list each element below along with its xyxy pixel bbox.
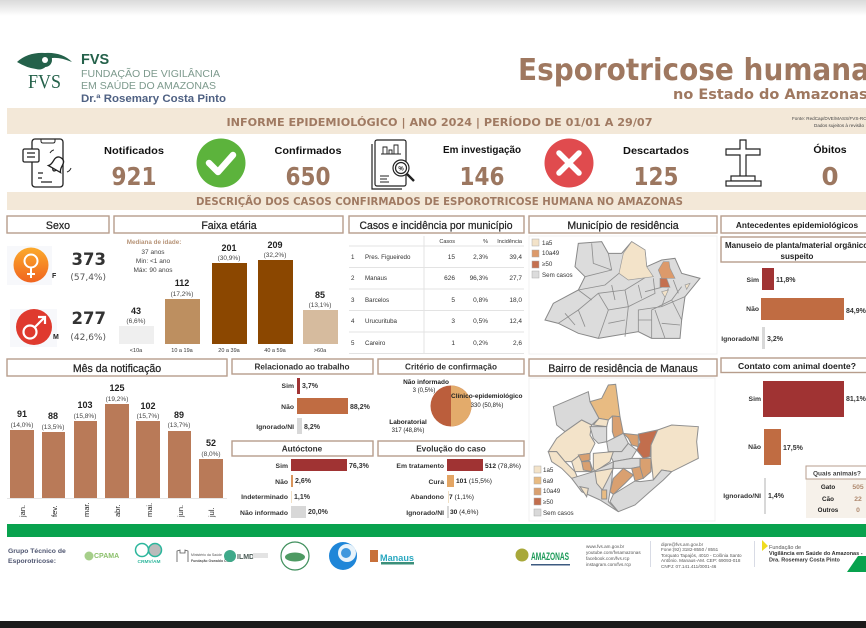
bar chart: idade: 209 <box>267 240 283 250</box>
panel: sexo: Sexo <box>46 220 70 232</box>
table: municipios: 5 <box>451 297 455 304</box>
table: quais animais: 0 <box>856 507 860 514</box>
bar chart: meses: 91 <box>17 409 27 419</box>
bar chart: meses: mai. <box>145 503 154 517</box>
panel: relacionado ao trabalho <box>232 359 373 434</box>
table: municipios: Manaus <box>365 275 387 282</box>
panel: manuseio: Ignorado/NI <box>721 336 759 343</box>
kpi: em investigacao: Em investigação <box>443 144 521 156</box>
bar chart: meses: 88 <box>48 411 58 421</box>
panel: manuseio: 3,2% <box>767 336 784 343</box>
table: municipios: 4 <box>351 318 355 325</box>
footer: contatos: Antônio. Manaus-AM. CEP: 69093-018 <box>661 558 741 563</box>
panel: criterio de confirmacao <box>378 359 524 434</box>
table: municipios: 0,2% <box>473 340 488 347</box>
legend: bairro: 10a49 <box>543 488 561 495</box>
legend: municipio: 10a49 <box>542 250 560 257</box>
panel: antecedentes epidemiologicos: Antecedentes epidemiológicos <box>736 220 858 230</box>
panel: relacionado ao trabalho: Não <box>281 404 294 411</box>
footer: contatos: instagram.com/fvs.rcp <box>586 562 631 567</box>
bar chart: idade <box>119 240 338 354</box>
panel: contato com animal: 81,1% <box>846 396 866 403</box>
bar chart: idade: (17,2%) <box>171 291 193 298</box>
panel: evolucao do caso: Ignorado/NI <box>406 510 444 517</box>
icon: grave cross <box>726 140 761 186</box>
logo: Fiocruz: Fundação Oswaldo Cruz <box>191 559 232 563</box>
kpi: notificados: Notificados <box>104 145 164 157</box>
table: municipios: 18,0 <box>509 297 522 304</box>
table: municipios: 0,5% <box>473 318 488 325</box>
table: municipios: % <box>483 239 488 245</box>
table: quais animais: 505 <box>852 484 864 491</box>
panel: relacionado ao trabalho: Ignorado/NI <box>256 424 294 431</box>
logo: ILMD: ILMD <box>237 554 254 561</box>
kpi: obitos: Óbitos <box>813 143 847 156</box>
bar chart: meses: 103 <box>77 400 93 410</box>
kpi: descartados <box>623 145 689 191</box>
panel: evolucao do caso: 30 (4,6%) <box>450 509 479 516</box>
kpi: confirmados: 650 <box>286 162 330 191</box>
logo: FVS: FVS <box>81 52 110 68</box>
logo: FVS: FUNDAÇÃO DE VIGILÂNCIA <box>81 67 220 80</box>
table: quais animais: Cão <box>822 496 834 503</box>
panel: autoctone: Não <box>275 479 288 486</box>
bar chart: idade: (6,6%) <box>126 318 146 325</box>
panel: evolucao do caso <box>378 441 524 518</box>
icon: female <box>7 246 52 285</box>
table: municipios <box>349 236 524 354</box>
panel: contato com animal: Não <box>748 444 761 451</box>
panel: contato com animal: Sim <box>749 396 761 403</box>
bar chart: idade: 112 <box>175 278 189 288</box>
panel: manuseio: 84,9% <box>846 308 866 315</box>
logo: ILMD <box>224 550 268 562</box>
panel: criterio de confirmacao: Critério de confirmação <box>405 362 497 372</box>
logo: Amazonas: AMAZONAS <box>531 551 569 563</box>
table: municipios: 1 <box>351 254 355 261</box>
panel: autoctone: Não informado <box>240 510 288 517</box>
logo: CPAMA <box>84 552 119 560</box>
legend: municipio <box>532 239 573 279</box>
table: municipios: 5 <box>351 340 355 347</box>
table: municipios: 2,6 <box>513 340 522 347</box>
logo: CRMV-AM <box>136 544 162 565</box>
panel: evolucao do caso: Abandono <box>410 494 444 501</box>
dark bottom strip <box>0 621 866 628</box>
table: municipios: 3 <box>451 318 455 325</box>
logo: CRMV-AM: CRMV/AM <box>138 559 160 565</box>
table: municipios: 1 <box>451 340 455 347</box>
table: quais animais: Quais animais? <box>813 470 861 478</box>
panel: antecedentes epidemiologicos <box>721 216 866 518</box>
icon: report with magnifier <box>372 140 414 189</box>
bar chart: meses: 102 <box>140 401 156 411</box>
footer: fundacao: Fundação de <box>769 545 801 551</box>
table: quais animais: 22 <box>854 496 862 503</box>
panel: relacionado ao trabalho: 3,7% <box>302 383 319 390</box>
logo: FVS: Dr.ª Rosemary Costa Pinto <box>81 93 226 105</box>
footer: fundacao: Vigilância em Saúde do Amazonas - <box>769 551 863 557</box>
logo: FVS <box>17 52 226 105</box>
legend: bairro: ≥50 <box>543 499 554 506</box>
title: no Estado do Amazonas <box>673 87 866 103</box>
table: quais animais <box>806 466 866 518</box>
kpi: confirmados: Confirmados <box>274 145 342 157</box>
bar chart: meses: abr. <box>113 504 122 517</box>
kpi: em investigacao: 146 <box>460 162 504 191</box>
table: municipios: 2,3% <box>473 254 488 261</box>
legend: bairro: Sem casos <box>543 510 574 517</box>
panel: manuseio: Sim <box>747 277 759 284</box>
table: municipios: 3 <box>351 297 355 304</box>
footer: grupo tecnico: Grupo Técnico de <box>8 548 66 555</box>
table: municipios: Pres. Figueiredo <box>365 254 411 261</box>
bar chart: meses: (14,0%) <box>11 422 33 429</box>
map: manaus <box>548 384 698 512</box>
panel: sexo: 373 <box>72 250 106 269</box>
bar chart: idade: >60a <box>314 348 327 354</box>
text: mediana de idade <box>127 239 181 274</box>
text: mediana de idade: 37 anos <box>141 249 165 256</box>
panel: contato com animal: 17,5% <box>783 445 804 452</box>
panel: autoctone: 76,3% <box>349 463 370 470</box>
panel: autoctone: Autóctone <box>282 444 323 454</box>
panel: manuseio: suspeito <box>781 252 814 261</box>
panel: bairro de residencia: Bairro de residência de Manaus <box>548 363 698 375</box>
panel: sexo <box>7 216 109 347</box>
panel: casos e incidencia <box>349 216 524 354</box>
bar chart: meses: fev. <box>50 505 59 517</box>
panel: manuseio <box>721 237 866 349</box>
logo: Fiocruz <box>177 550 232 563</box>
table: municipios: 39,4 <box>509 254 522 261</box>
panel: municipio de residencia: Município de residência <box>567 220 679 232</box>
table: municipios: 0,8% <box>473 297 488 304</box>
bar chart: meses: 52 <box>206 438 216 448</box>
table: municipios: 27,7 <box>509 275 522 282</box>
panel: contato com animal: Contato com animal doente? <box>738 361 856 371</box>
table: quais animais: Outros <box>818 507 839 514</box>
bar chart: meses: (8,0%) <box>201 451 221 458</box>
bar chart: meses: (13,7%) <box>168 422 190 429</box>
table: municipios: 626 <box>444 275 455 282</box>
table: municipios: Urucurituba <box>365 318 398 325</box>
legend: bairro: 6a9 <box>543 478 554 485</box>
bar chart: idade: 40 a 59a <box>264 348 287 354</box>
green bar <box>7 524 866 537</box>
banner: informe: Dados sujeitos à revisão <box>814 123 864 128</box>
panel: evolucao do caso: Cura <box>428 479 444 486</box>
kpi: confirmados <box>274 145 342 191</box>
panel: autoctone: 1,1% <box>294 494 311 501</box>
panel: faixa etaria: Faixa etária <box>201 220 257 232</box>
panel: relacionado ao trabalho: 88,2% <box>350 404 371 411</box>
panel: manuseio: 11,8% <box>776 277 796 284</box>
footer: contatos: CNPJ: 07.141.411/0001-46 <box>661 564 717 569</box>
banner: descricao: DESCRIÇÃO DOS CASOS CONFIRMADOS DE ESPOROTRICOSE HUMANA NO AMAZONAS <box>196 195 683 208</box>
panel: relacionado ao trabalho: Sim <box>282 383 294 390</box>
bar chart: idade: 43 <box>131 306 141 316</box>
table: municipios: 96,3% <box>470 275 488 282</box>
panel: sexo: 277 <box>72 309 106 328</box>
bar chart: meses: (19,2%) <box>106 396 128 403</box>
footer: grupo tecnico <box>8 548 66 565</box>
table: municipios: 12,4 <box>509 318 522 325</box>
kpi: notificados <box>104 145 164 191</box>
icon: male <box>10 309 57 347</box>
panel: sexo: F <box>52 273 57 280</box>
pie chart: criterio: Clínico-epidemiológico <box>451 393 523 400</box>
icon: report with magnifier: % <box>398 166 404 172</box>
pie chart: criterio: Laboratorial <box>389 419 427 426</box>
banner: informe <box>7 108 866 134</box>
bar chart: idade: (13,1%) <box>309 302 331 309</box>
logo: Amazonas <box>516 548 570 566</box>
panel: bairro de residencia <box>529 359 717 521</box>
bar chart: idade: 85 <box>315 290 325 300</box>
panel: contato com animal: 1,4% <box>768 493 785 500</box>
kpi: notificados: 921 <box>112 162 156 191</box>
footer: contatos: facebook.com/fvs.rcp <box>586 556 630 561</box>
logo: Manaus <box>370 550 414 564</box>
panel: mes da notificacao: Mês da notificação <box>73 363 161 375</box>
panel: autoctone: 2,6% <box>295 478 312 485</box>
panel: sexo: M <box>53 334 59 341</box>
icon: check <box>196 138 246 188</box>
map: amazonas <box>545 242 700 338</box>
panel: relacionado ao trabalho: 8,2% <box>304 424 321 431</box>
kpi: descartados: Descartados <box>623 145 689 157</box>
footer: grupo tecnico: Esporotricose: <box>8 558 56 565</box>
logo: Fiocruz: Ministério da Saúde <box>191 553 222 557</box>
panel: manuseio: Não <box>746 306 759 313</box>
bar chart: meses: jan. <box>18 505 27 518</box>
bar chart: meses: (15,8%) <box>74 413 96 420</box>
logo: CPAMA: CPAMA <box>94 553 119 560</box>
bar chart: idade: 10 a 19a <box>171 348 194 354</box>
bar chart: meses: jul. <box>207 507 216 518</box>
text: mediana de idade: Mediana de idade: <box>127 239 181 246</box>
panel: manuseio: Manuseio de planta/material orgânico <box>725 241 866 250</box>
panel: autoctone <box>232 441 373 518</box>
bar chart: meses: (13,5%) <box>42 424 64 431</box>
footer: contatos: www.fvs.am.gov.br <box>586 544 625 549</box>
text: mediana de idade: Máx: 90 anos <box>133 267 173 274</box>
logo: seal <box>281 542 309 570</box>
panel: sexo: (57,4%) <box>70 273 106 283</box>
panel: evolucao do caso: 7 (1,1%) <box>449 494 474 501</box>
panel: contato com animal: Ignorado/NI <box>723 493 761 500</box>
legend: municipio: 1a5 <box>542 240 553 247</box>
pie chart: criterio: 3 (0,5%) <box>413 388 435 394</box>
table: municipios: Incidência <box>497 239 523 245</box>
legend: bairro: 1a5 <box>543 467 554 474</box>
panel: mes da notificacao <box>7 359 227 518</box>
kpi: obitos: 0 <box>821 162 839 191</box>
panel: evolucao do caso: 101 (15,5%) <box>456 478 492 485</box>
bar chart: idade: 20 a 39a <box>218 348 241 354</box>
bar chart: meses: jun. <box>176 505 185 518</box>
panel: relacionado ao trabalho: Relacionado ao trabalho <box>254 362 350 372</box>
footer: contatos: Fone:(92) 3182-8550 / 8551 <box>661 547 719 552</box>
bar chart: meses: mar. <box>82 502 91 517</box>
kpi: descartados: 125 <box>634 162 678 191</box>
bar chart: meses <box>7 383 227 518</box>
footer: fundacao: Dra. Rosemary Costa Pinto <box>769 558 841 564</box>
pie chart: criterio: Não informado <box>403 379 449 386</box>
logo: FVS: FVS <box>28 71 61 93</box>
panel: evolucao do caso: Evolução do caso <box>416 444 486 454</box>
panel: municipio de residencia <box>529 216 717 354</box>
logo: globe <box>329 542 357 570</box>
banner: informe: INFORME EPIDEMIOLÓGICO | ANO 2024 | PERÍODO DE 01/01 A 29/07 <box>226 116 652 129</box>
panel: autoctone: Sim <box>276 463 288 470</box>
legend: municipio: Sem casos <box>542 272 573 279</box>
table: municipios: Casos <box>439 239 455 245</box>
pie chart: criterio <box>389 379 523 434</box>
pie chart: criterio: 330 (50,8%) <box>471 403 503 409</box>
icon: phone with bell <box>23 139 71 187</box>
panel: autoctone: 20,0% <box>308 509 329 516</box>
footer: contatos <box>586 541 755 569</box>
footer: contatos: Torquato Tapajós, 4010 - Colônia Santo <box>661 553 742 558</box>
legend: municipio: ≥50 <box>542 261 553 268</box>
table: municipios: Careiro <box>365 340 386 347</box>
text: mediana de idade: Min: <1 ano <box>136 258 170 265</box>
footer: contatos: dipre@fvs.am.gov.br <box>661 542 704 547</box>
panel: sexo: (42,6%) <box>70 333 106 343</box>
footer: contatos: youtube.com/fvsamazonas <box>586 550 641 555</box>
bar chart: idade: 201 <box>221 243 237 253</box>
pie chart: criterio: 317 (48,8%) <box>392 428 424 434</box>
panel: casos e incidencia: Casos e incidência por município <box>360 220 513 232</box>
panel: evolucao do caso: 512 (78,8%) <box>485 463 521 470</box>
logo: FVS: EM SAÚDE DO AMAZONAS <box>81 79 216 92</box>
bar chart: idade: <10a <box>130 348 143 354</box>
kpi: em investigacao <box>443 144 521 191</box>
table: municipios: Barcelos <box>365 297 389 304</box>
bar chart: meses: 125 <box>109 383 125 393</box>
bar chart: idade: (30,9%) <box>218 255 240 262</box>
panel: contato com animal <box>721 358 866 518</box>
bar chart: meses: (15,7%) <box>137 413 159 420</box>
banner: descricao <box>7 192 866 210</box>
icon: cross mark <box>544 138 594 188</box>
bar chart: idade: (32,2%) <box>264 252 286 259</box>
table: municipios: 15 <box>448 254 455 261</box>
logo: Manaus: Manaus <box>380 553 414 564</box>
kpi: obitos <box>813 143 847 191</box>
panel: autoctone: Indeterminado <box>241 494 288 501</box>
bar chart: meses: 89 <box>174 410 184 420</box>
panel: faixa etaria <box>114 216 343 354</box>
footer: fundacao <box>762 540 866 572</box>
panel: evolucao do caso: Em tratamento <box>396 463 444 470</box>
table: municipios: 2 <box>351 275 355 282</box>
legend: bairro <box>534 466 574 517</box>
table: quais animais: Gato <box>821 484 835 491</box>
